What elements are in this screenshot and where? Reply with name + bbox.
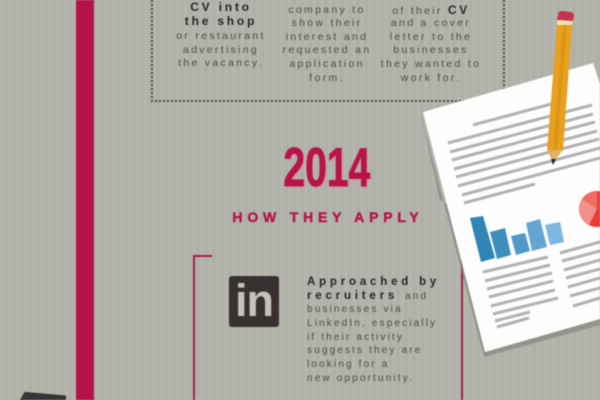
column text: company application form <box>282 4 371 84</box>
pie chart <box>579 191 600 227</box>
icon: pencil <box>547 11 574 165</box>
text block: approached by recruiters: new opportunity. <box>307 373 414 384</box>
bracket left corner <box>193 255 212 400</box>
column text: CV and cover letter: of their CV <box>392 3 470 17</box>
text block: approached by recruiters: if their activity <box>307 332 404 343</box>
column text: CV and cover letter <box>380 3 481 84</box>
column text: CV into the shop: or restaurant <box>176 30 266 42</box>
column text: CV into the shop <box>176 0 266 69</box>
subheading: HOW THEY APPLY <box>232 209 424 225</box>
text block: approached by recruiters: recruiters and <box>307 290 428 302</box>
column text: CV and cover letter: businesses <box>393 44 469 56</box>
bracket panel: LinkedIn recruiters <box>192 254 464 400</box>
column text: CV into the shop: CV into <box>190 0 252 14</box>
year heading: 2014 <box>283 136 370 198</box>
paper shadow <box>421 115 600 357</box>
text block: approached by recruiters: LinkedIn, especially <box>307 318 437 329</box>
bar chart <box>470 216 564 262</box>
text lines on paper top <box>448 103 600 203</box>
column text: CV into the shop: advertising <box>183 44 259 56</box>
dotted panel: earlier application methods <box>151 0 505 102</box>
text lines under chart right <box>560 242 600 306</box>
column text: CV and cover letter: work for. <box>401 72 461 84</box>
column text: company application form: application <box>289 58 365 70</box>
icon: dark object at lower left edge <box>20 391 66 400</box>
text block: approached by recruiters: looking for a <box>307 359 389 370</box>
column text: company application form: show their <box>292 17 362 29</box>
column text: company application form: requested an <box>283 44 371 56</box>
paper sheet <box>423 63 600 352</box>
column text: company application form: interest and <box>286 31 368 43</box>
column text: CV and cover letter: they wanted to <box>381 58 481 70</box>
timeline bar <box>76 0 94 400</box>
column text: company application form: form. <box>309 72 345 84</box>
text block: approached by recruiters <box>306 275 440 384</box>
column text: CV into the shop: the shop <box>185 14 257 28</box>
column text: CV and cover letter: letter to the <box>390 31 472 43</box>
text block: approached by recruiters: suggests they are <box>307 345 422 356</box>
text block: approached by recruiters: businesses via <box>307 304 403 315</box>
column text: CV into the shop: the vacancy. <box>178 57 264 69</box>
column text: CV and cover letter: and a cover <box>391 17 471 29</box>
column text: company application form: company to <box>288 4 366 16</box>
bracket right side <box>461 257 463 400</box>
text block: approached by recruiters: Approached by <box>307 276 440 288</box>
icon: LinkedIn: in <box>235 275 273 326</box>
text lines under chart left <box>483 257 558 327</box>
